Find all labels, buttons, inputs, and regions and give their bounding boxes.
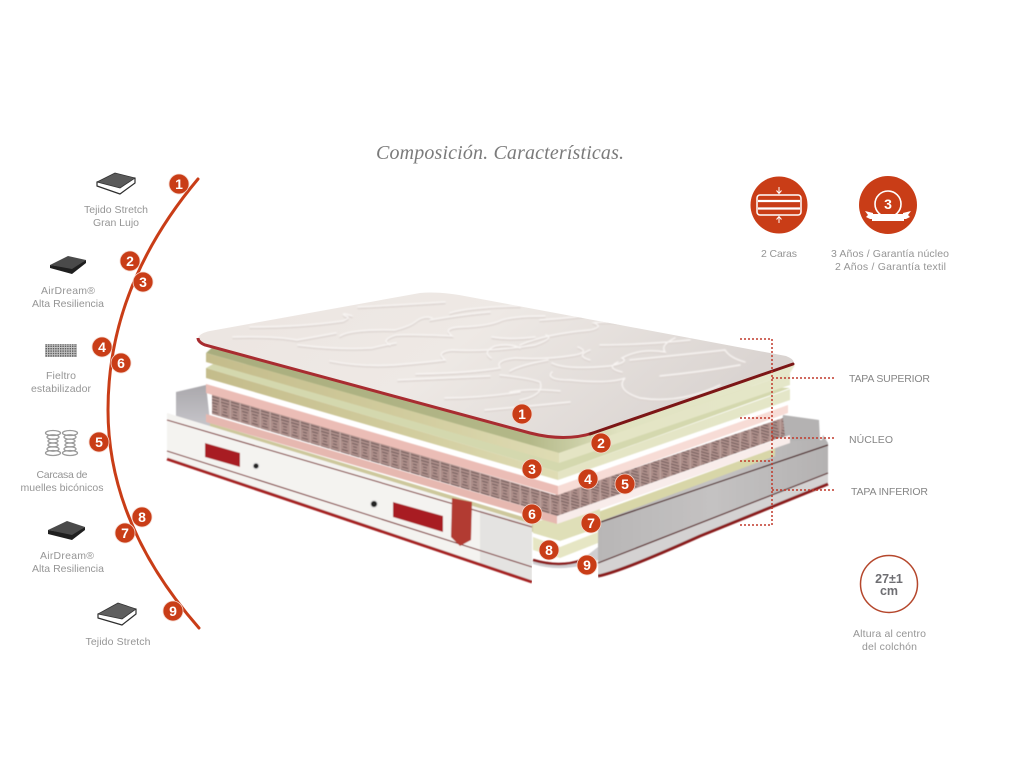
icon: airdream 2 bbox=[48, 521, 85, 540]
legend number badges: 5 bbox=[95, 434, 103, 450]
layer legend curve bbox=[108, 179, 199, 628]
red tag bbox=[451, 498, 472, 546]
label: altura: Altura al centro bbox=[853, 628, 926, 640]
icon: altura circle: cm bbox=[880, 584, 898, 598]
label: airdream 2: Alta Resiliencia bbox=[32, 563, 104, 575]
icon: garantia: 3 bbox=[884, 196, 892, 212]
right side cover bbox=[598, 435, 828, 578]
mattress body bbox=[167, 345, 828, 583]
title: Composición. Características. bbox=[376, 142, 624, 164]
icon: altura circle bbox=[860, 556, 918, 612]
handle left bbox=[205, 443, 240, 467]
lower yellow strips bbox=[210, 423, 775, 532]
mattress number badges: 6 bbox=[528, 506, 536, 522]
panel: mattress cutaway bbox=[167, 292, 828, 590]
label: tejido stretch gran lujo: Gran Lujo bbox=[93, 217, 139, 229]
dotted section brackets bbox=[740, 339, 836, 525]
legend number badges bbox=[89, 174, 189, 621]
panel: garantia bbox=[831, 176, 949, 273]
icon: 2 caras bbox=[750, 176, 808, 234]
bottom yellow layers 7 and 8 bbox=[533, 508, 600, 568]
yellow layer 3 bbox=[206, 363, 790, 480]
mattress number badges: 1 bbox=[518, 406, 526, 422]
pink layer 6 bbox=[206, 414, 790, 524]
mattress number badges: 5 bbox=[621, 476, 629, 492]
label: fieltro: estabilizador bbox=[31, 383, 92, 395]
eyelet left bbox=[253, 463, 259, 469]
spring core bbox=[212, 393, 785, 516]
mattress number badges bbox=[512, 404, 635, 575]
mattress number badges: 7 bbox=[587, 515, 595, 531]
label: 2 caras: 2 Caras bbox=[761, 248, 797, 260]
back inner grey walls bbox=[176, 385, 820, 441]
label: airdream 1: Alta Resiliencia bbox=[32, 298, 104, 310]
legend number badges: 7 bbox=[121, 525, 129, 541]
label: nucleo: NÚCLEO bbox=[849, 433, 893, 446]
eyelet right bbox=[370, 500, 378, 508]
white gap at front cut bbox=[532, 565, 598, 590]
pink layer 4 bbox=[206, 384, 788, 495]
label: tejido stretch: Tejido Stretch bbox=[86, 636, 151, 648]
mattress number badges: 8 bbox=[545, 542, 553, 558]
legend number badges: 6 bbox=[117, 355, 125, 371]
mattress number badges: 9 bbox=[583, 557, 591, 573]
icon: muelles bbox=[46, 430, 78, 456]
label: garantia: 3 Años / Garantía núcleo bbox=[831, 248, 949, 260]
label: tapa inferior: TAPA INFERIOR bbox=[851, 486, 928, 498]
label: airdream 1: AirDream® bbox=[41, 285, 95, 297]
label: muelles: Carcasa de bbox=[36, 469, 88, 481]
handle right bbox=[393, 502, 443, 532]
legend number badges: 3 bbox=[139, 274, 147, 290]
icon: altura circle: 27±1 bbox=[875, 572, 903, 586]
legend number badges: 9 bbox=[169, 603, 177, 619]
top panel bbox=[198, 292, 794, 438]
panel: altura bbox=[853, 556, 926, 653]
mattress number badges: 4 bbox=[584, 471, 592, 487]
legend number badges: 2 bbox=[126, 253, 134, 269]
icon: tejido stretch gran lujo bbox=[97, 173, 135, 194]
left side cover with handles bbox=[167, 413, 532, 583]
legend number badges: 4 bbox=[98, 339, 106, 355]
icon: airdream 1 bbox=[50, 256, 86, 274]
panel: layer legend bbox=[20, 173, 151, 648]
yellow layer 2 bbox=[206, 345, 795, 463]
panel: 2 caras bbox=[750, 176, 808, 260]
label: tapa superior: TAPA SUPERIOR bbox=[849, 373, 930, 385]
icon: fieltro bbox=[45, 344, 77, 357]
label: fieltro: Fieltro bbox=[46, 370, 76, 382]
legend number badges: 1 bbox=[175, 176, 183, 192]
label: altura: del colchón bbox=[862, 641, 917, 653]
label: muelles: muelles bicónicos bbox=[20, 482, 104, 494]
icon: tejido stretch bbox=[98, 603, 136, 625]
mattress number badges: 2 bbox=[597, 435, 605, 451]
legend number badges: 8 bbox=[138, 509, 146, 525]
mattress number badges: 3 bbox=[528, 461, 536, 477]
label: airdream 2: AirDream® bbox=[40, 550, 94, 562]
label: tejido stretch gran lujo: Tejido Stretch bbox=[84, 204, 148, 216]
label: garantia: 2 Años / Garantía textil bbox=[835, 261, 946, 273]
